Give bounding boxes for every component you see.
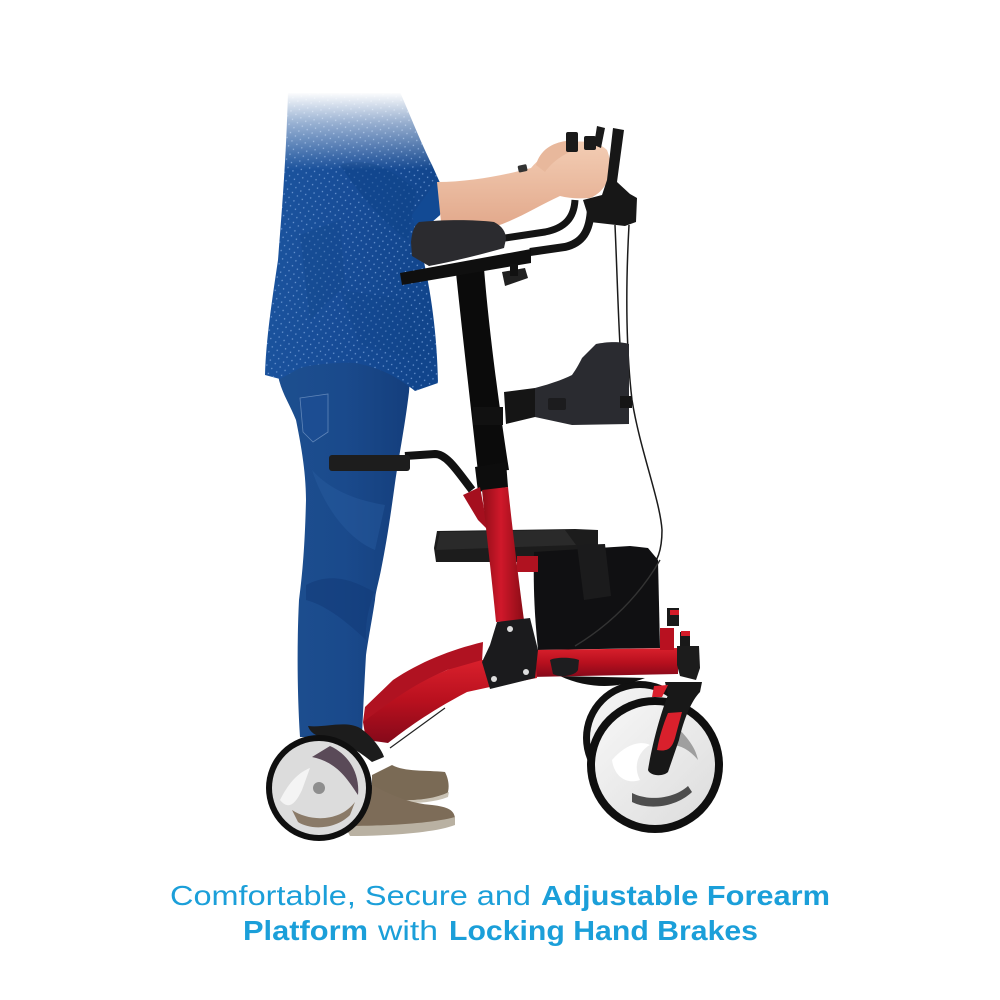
far shoe [372,765,449,800]
caption line 2 regular: with [377,915,438,946]
horizontal tube [530,648,678,677]
caption line 2 bold left: Platform [243,915,368,946]
basket seat behind frame [434,529,598,562]
cup holder [550,658,579,676]
curved tube upper [363,642,483,722]
near shoe [305,785,455,833]
folding bracket [482,618,538,689]
column collar [475,462,508,492]
rollator upper column [456,268,509,472]
diagonal brace [463,487,488,530]
back support cushion [473,342,632,425]
brake cables [575,225,662,645]
storage bag [534,544,660,686]
seat tube [482,487,524,622]
caption line 1 bold: Adjustable Forearm [541,880,830,911]
rollator rear front wheel [583,681,697,795]
rear handle with grip [329,454,472,490]
foot brake fender [308,724,384,762]
person legs: jeans [275,350,412,737]
person arm and hands [437,141,610,226]
forearm platform [400,220,531,286]
person shirt [265,86,445,391]
caption line 1 regular: Comfortable, Secure and [170,880,531,911]
brake handles and grips [505,126,637,252]
front wheel [587,697,723,833]
front wheel fork [648,608,702,775]
rollator red frame [363,487,678,748]
caption line 2 bold right: Locking Hand Brakes [449,915,758,946]
rear wheel [266,735,372,841]
person shoes [305,765,455,836]
curved tube lower [363,660,537,743]
caption [170,880,830,946]
